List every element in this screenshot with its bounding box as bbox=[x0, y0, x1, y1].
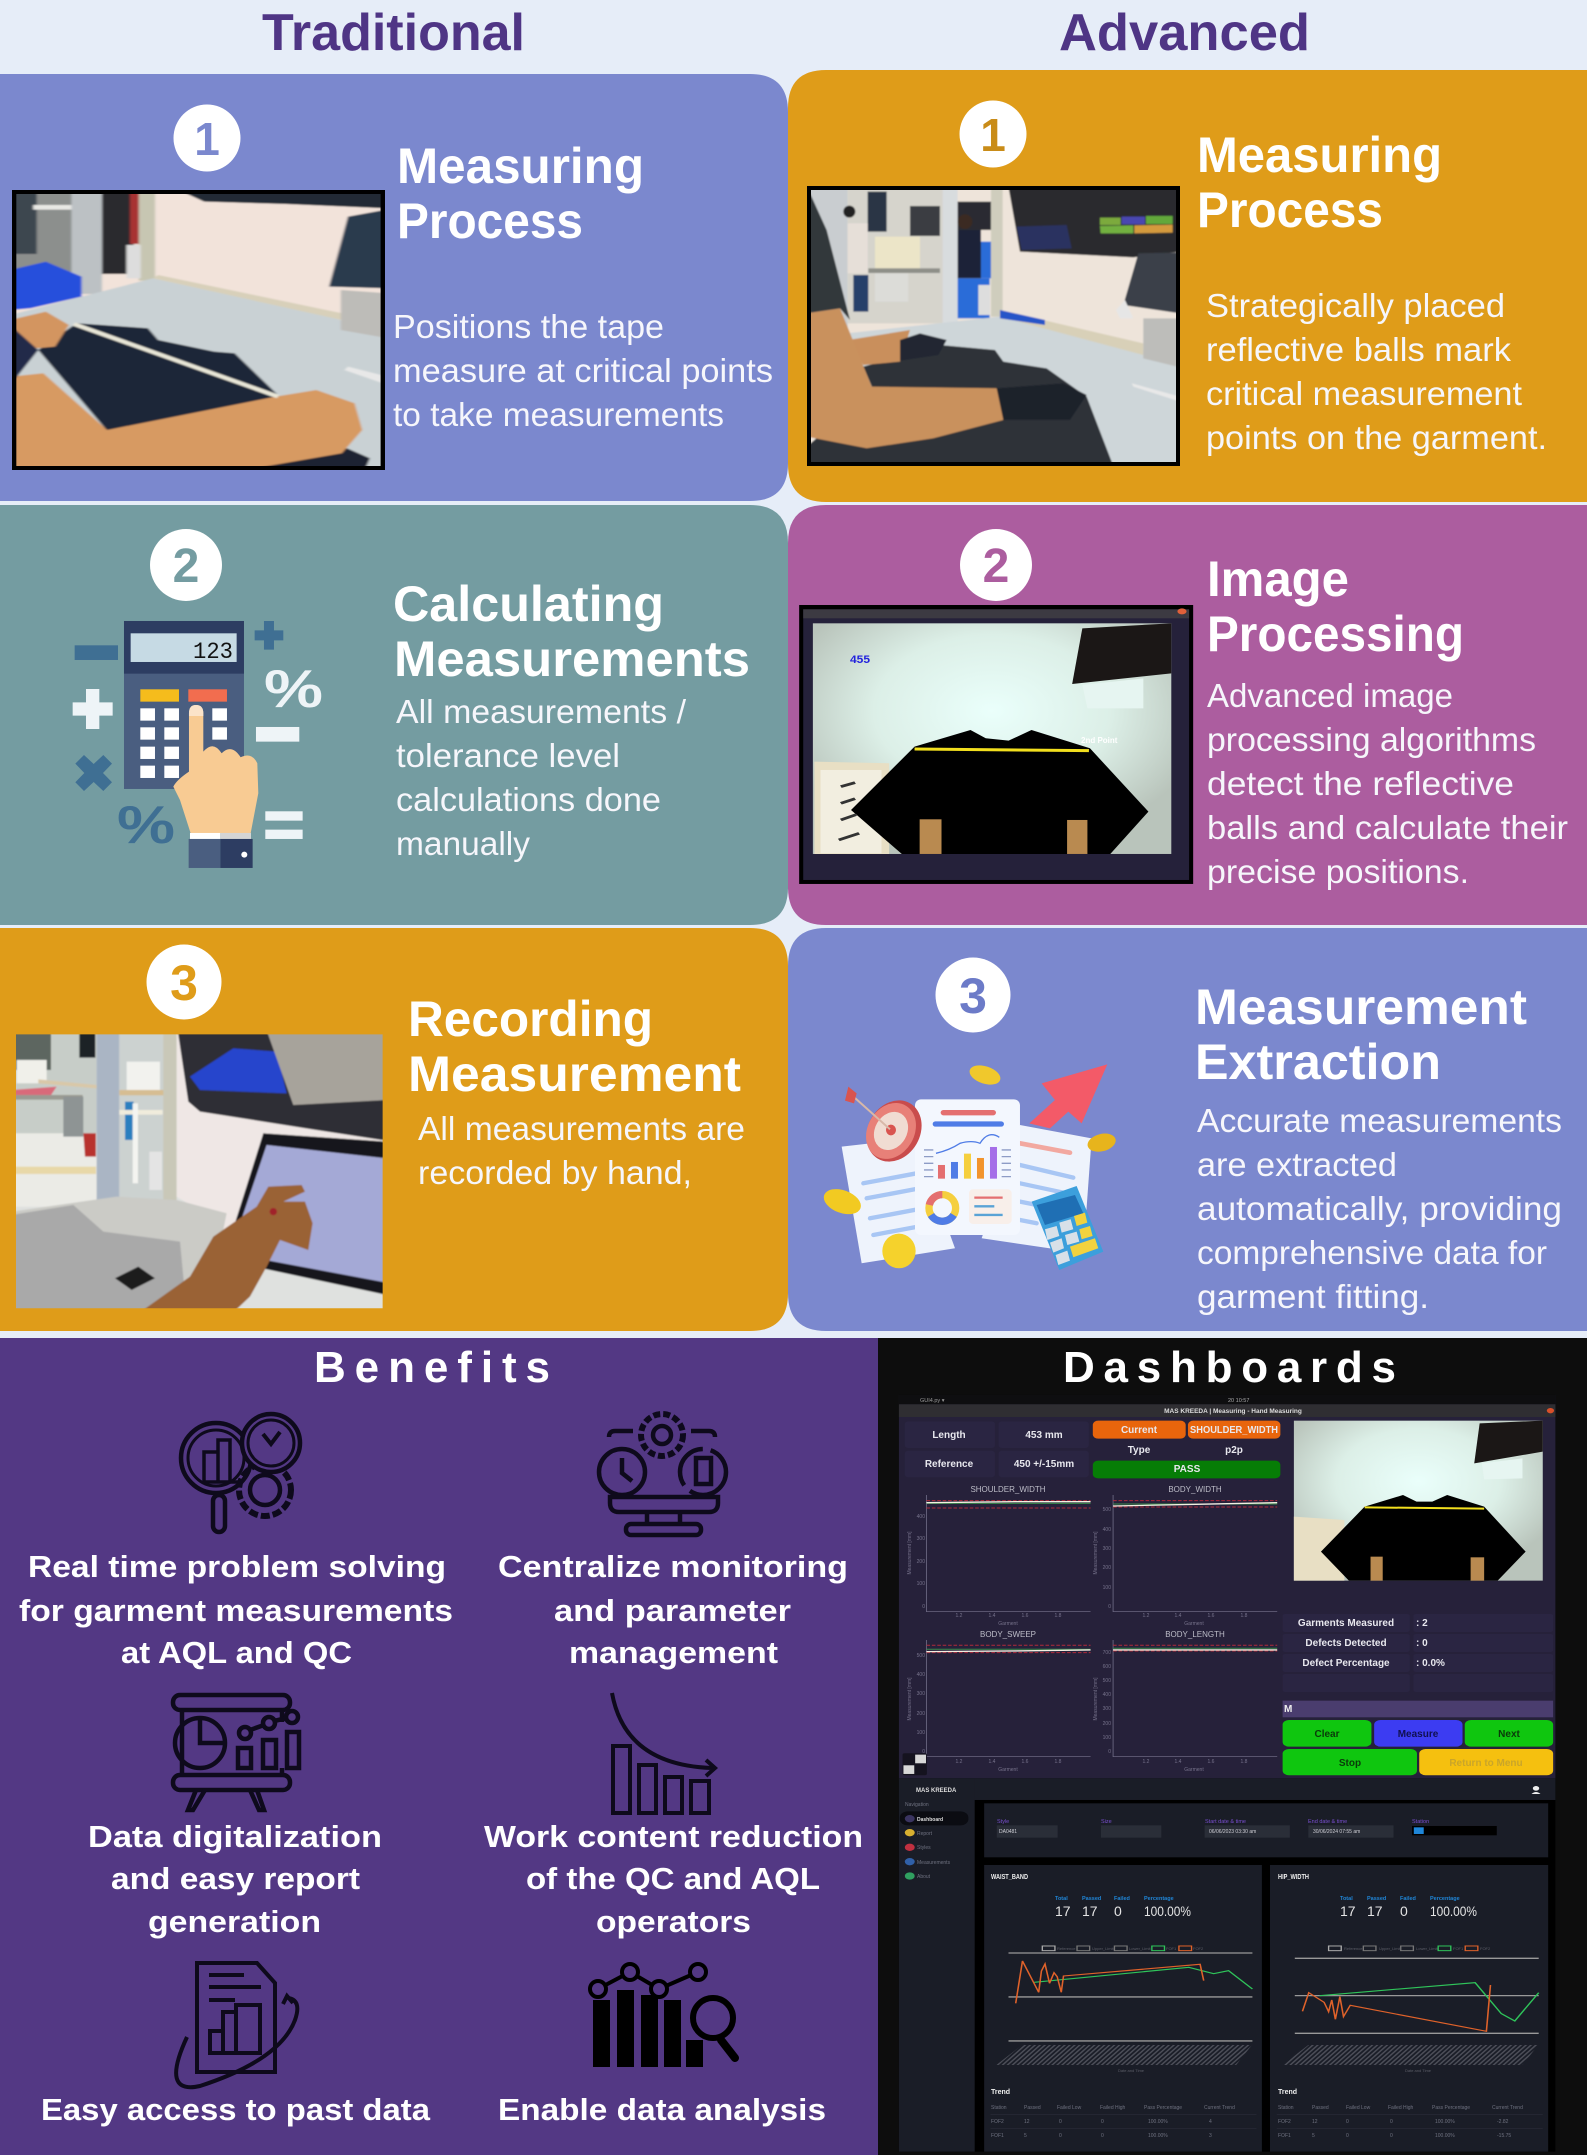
screenshot: trend dashboard: About bbox=[917, 1874, 931, 1880]
screenshot: trend dashboard: FOF1 bbox=[1453, 1946, 1464, 1951]
screenshot: trend dashboard: Styles bbox=[917, 1845, 931, 1851]
screenshot: trend dashboard: Reference bbox=[1057, 1946, 1076, 1951]
screenshot: trend dashboard: 100.00% bbox=[1144, 1903, 1191, 1919]
screenshot: image processing window: 2nd Point bbox=[1081, 736, 1118, 745]
screenshot: trend dashboard: FOF1 bbox=[1166, 1946, 1177, 1951]
screenshot: hand measuring dashboard: Type bbox=[1128, 1445, 1151, 1456]
icon: calculator and hand bbox=[73, 621, 323, 868]
screenshot: hand measuring dashboard: 400 bbox=[917, 1514, 925, 1520]
text: real time problem solving: Real time problem solving bbox=[28, 1549, 446, 1584]
screenshot: hand measuring dashboard: 100 bbox=[917, 1581, 925, 1587]
screenshot: hand measuring dashboard: 1.6 bbox=[1022, 1759, 1029, 1765]
heading: Dashboards: Dashboards bbox=[1063, 1343, 1396, 1392]
step number 3: 3 bbox=[170, 955, 198, 1011]
screenshot: trend dashboard: Date and Time bbox=[1405, 2068, 1432, 2073]
screenshot: hand measuring dashboard: Garments Measured bbox=[1298, 1618, 1394, 1629]
body text: calculations done bbox=[396, 781, 661, 818]
screenshot: hand measuring dashboard: GUI4.py ▾ bbox=[920, 1398, 945, 1404]
screenshot: hand measuring dashboard: 300 bbox=[1103, 1546, 1111, 1552]
step number 2 bbox=[960, 529, 1032, 601]
body text: Advanced image bbox=[1207, 677, 1453, 714]
screenshot: trend dashboard: Station bbox=[991, 2105, 1007, 2111]
screenshot: trend dashboard: 06/06/2023 03:30 am bbox=[1209, 1829, 1256, 1835]
screenshot: trend dashboard: Upper_Limit bbox=[1092, 1946, 1114, 1951]
screenshot: hand measuring dashboard: 100 bbox=[1103, 1585, 1111, 1591]
screenshot: trend dashboard: Trend bbox=[991, 2089, 1010, 2096]
text: centralize monitoring bbox=[498, 1549, 848, 1670]
screenshot: hand measuring dashboard: 1.4 bbox=[1175, 1759, 1182, 1765]
screenshot: hand measuring dashboard: M bbox=[1284, 1704, 1292, 1715]
screenshot: hand measuring dashboard: 400 bbox=[1103, 1527, 1111, 1533]
heading: Benefits: Benefits bbox=[314, 1343, 550, 1392]
screenshot: hand measuring dashboard: Next bbox=[1498, 1729, 1521, 1740]
screenshot: hand measuring dashboard: Measurement [mm] bbox=[907, 1677, 913, 1721]
screenshot: trend dashboard: 0 bbox=[1059, 2119, 1062, 2125]
screenshot: hand measuring dashboard: Return to Menu bbox=[1449, 1758, 1523, 1769]
screenshot: hand measuring dashboard: Defect Percentage bbox=[1302, 1658, 1390, 1669]
body text: points on the garment. bbox=[1206, 419, 1547, 456]
screenshot: image processing window bbox=[799, 605, 1193, 884]
screenshot: trend dashboard: Failed bbox=[1114, 1896, 1130, 1902]
screenshot: hand measuring dashboard: 1.2 bbox=[956, 1613, 963, 1619]
title: Measuring Process bbox=[397, 138, 644, 249]
screenshot: hand measuring dashboard: 300 bbox=[1103, 1706, 1111, 1712]
panel: dashboards bbox=[878, 1338, 1587, 2155]
step number 2 bbox=[150, 529, 222, 601]
title: Measuring Process: Process bbox=[397, 193, 583, 249]
screenshot: hand measuring dashboard: PASS bbox=[1174, 1464, 1201, 1475]
screenshot: trend dashboard: Date and Time bbox=[1118, 2068, 1145, 2073]
body text: Positions the tape bbox=[393, 308, 664, 345]
text: work content reduction: operators bbox=[596, 1904, 751, 1939]
body text: All measurements are bbox=[418, 1110, 745, 1147]
text: centralize monitoring: management bbox=[569, 1635, 778, 1670]
screenshot: hand measuring dashboard: 1.2 bbox=[1143, 1759, 1150, 1765]
screenshot: trend dashboard: DA0481 bbox=[999, 1829, 1017, 1835]
screenshot: hand measuring dashboard: SHOULDER_WIDTH bbox=[970, 1485, 1046, 1494]
text: work content reduction: of the QC and AQL bbox=[526, 1861, 820, 1896]
body text: comprehensive data for bbox=[1197, 1234, 1547, 1271]
screenshot: hand measuring dashboard: BODY_LENGTH bbox=[1165, 1630, 1225, 1639]
screenshot: trend dashboard: Passed bbox=[1312, 2105, 1329, 2111]
step number 2: 2 bbox=[983, 540, 1009, 593]
screenshot: trend dashboard: 0 bbox=[1101, 2119, 1104, 2125]
screenshot: hand measuring dashboard: MAS KREEDA | Measuring - Hand Measuring bbox=[1164, 1408, 1302, 1415]
screenshot: hand measuring dashboard: 1.8 bbox=[1055, 1759, 1062, 1765]
screenshot: hand measuring dashboard: 1.2 bbox=[1143, 1613, 1150, 1619]
icon: declining bars with arrow bbox=[612, 1693, 715, 1813]
screenshot: trend dashboard: Current Trend bbox=[1492, 2105, 1523, 2111]
screenshot: trend dashboard: Trend bbox=[1278, 2089, 1297, 2096]
step number 3: 3 bbox=[959, 968, 987, 1024]
screenshot: trend dashboard: 17 bbox=[1055, 1903, 1071, 1919]
screenshot: hand measuring dashboard: Stop bbox=[1339, 1758, 1361, 1769]
screenshot: trend dashboard: Failed Low bbox=[1346, 2105, 1371, 2111]
text: real time problem solving: at AQL and QC bbox=[121, 1635, 352, 1670]
screenshot: trend dashboard: Station bbox=[1412, 1819, 1429, 1825]
title: Calculating Measurements: Calculating bbox=[393, 576, 664, 632]
screenshot: hand measuring dashboard: Garment bbox=[998, 1621, 1018, 1627]
body text: detect the reflective bbox=[1207, 765, 1514, 802]
icon: calculator and hand: % bbox=[264, 660, 323, 719]
screenshot: trend dashboard: 100.00% bbox=[1148, 2133, 1168, 2139]
screenshot: trend dashboard: HIP_WIDTH bbox=[1278, 1874, 1309, 1881]
body text: processing algorithms bbox=[1207, 721, 1536, 758]
screenshot: hand measuring dashboard: 450 +/-15mm bbox=[1014, 1459, 1074, 1470]
screenshot: trend dashboard: 100.00% bbox=[1435, 2133, 1455, 2139]
title: Recording Measurement: Recording bbox=[408, 991, 653, 1047]
text: data digitalization: and easy report bbox=[111, 1861, 360, 1896]
body text: reflective balls mark bbox=[1206, 331, 1512, 368]
screenshot: hand measuring dashboard: 200 bbox=[917, 1711, 925, 1717]
screenshot: trend dashboard: End date & time bbox=[1308, 1819, 1347, 1825]
screenshot: hand measuring dashboard: Measurement [mm] bbox=[1093, 1677, 1099, 1721]
screenshot: hand measuring dashboard: Reference bbox=[925, 1459, 974, 1470]
screenshot: trend dashboard: Navigation bbox=[905, 1802, 929, 1808]
screenshot: trend dashboard: Failed High bbox=[1388, 2105, 1414, 2111]
screenshot: hand measuring dashboard: 20 10:57 bbox=[1228, 1398, 1249, 1404]
screenshot: trend dashboard: 0 bbox=[1346, 2119, 1349, 2125]
screenshot: hand measuring dashboard: 400 bbox=[917, 1672, 925, 1678]
screenshot: hand measuring dashboard: Garment bbox=[1184, 1621, 1204, 1627]
screenshot: hand measuring dashboard: SHOULDER_WIDTH bbox=[1190, 1425, 1278, 1436]
screenshot: hand measuring dashboard: Measurement [mm] bbox=[1093, 1531, 1099, 1575]
screenshot: hand measuring dashboard: Measurement [mm] bbox=[907, 1531, 913, 1575]
screenshot: trend dashboard: Failed Low bbox=[1057, 2105, 1082, 2111]
screenshot: trend dashboard: Reference bbox=[1344, 1946, 1363, 1951]
title: Image Processing bbox=[1207, 551, 1464, 662]
screenshot: hand measuring dashboard: 0 bbox=[1108, 1604, 1111, 1610]
screenshot: hand measuring dashboard: 1.8 bbox=[1241, 1613, 1248, 1619]
screenshot: trend dashboard: FOF2 bbox=[1480, 1946, 1491, 1951]
step number 2: 2 bbox=[173, 540, 199, 593]
screenshot: trend dashboard: -2.82 bbox=[1497, 2119, 1509, 2125]
screenshot: trend dashboard: Percentage bbox=[1430, 1896, 1460, 1902]
screenshot: trend dashboard: WAIST_BAND bbox=[991, 1874, 1028, 1881]
screenshot: hand measuring dashboard: 300 bbox=[917, 1536, 925, 1542]
screenshot: hand measuring dashboard: 500 bbox=[1103, 1507, 1111, 1513]
screenshot: hand measuring dashboard: Measure bbox=[1398, 1729, 1439, 1740]
title: Measurement Extraction: Extraction bbox=[1195, 1034, 1441, 1090]
screenshot: hand measuring dashboard: 1.6 bbox=[1022, 1613, 1029, 1619]
body text: manually bbox=[396, 825, 530, 862]
step number 1: 1 bbox=[194, 113, 220, 165]
body text: tolerance level bbox=[396, 737, 620, 774]
screenshot: trend dashboard: Measurements bbox=[917, 1860, 951, 1866]
screenshot: hand measuring dashboard: 453 mm bbox=[1025, 1430, 1063, 1441]
body text: Accurate measurements bbox=[1197, 1102, 1562, 1139]
screenshot: hand measuring dashboard: 1.6 bbox=[1208, 1613, 1215, 1619]
title: Recording Measurement bbox=[408, 991, 741, 1102]
screenshot: trend dashboard: Lower_Limit bbox=[1129, 1946, 1151, 1951]
screenshot: hand measuring dashboard: 0 bbox=[922, 1749, 925, 1755]
text: centralize monitoring: Centralize monitoring bbox=[498, 1549, 848, 1584]
screenshot: trend dashboard: 0 bbox=[1390, 2133, 1393, 2139]
screenshot: trend dashboard: 5 bbox=[1024, 2133, 1027, 2139]
screenshot: trend dashboard: Failed High bbox=[1100, 2105, 1126, 2111]
screenshot: trend dashboard: Lower_Limit bbox=[1416, 1946, 1438, 1951]
screenshot: hand measuring dashboard bbox=[899, 1395, 1555, 1780]
screenshot: hand measuring dashboard: 1.6 bbox=[1208, 1759, 1215, 1765]
body text: are extracted bbox=[1197, 1146, 1397, 1183]
icon: document with chart and arrow bbox=[176, 1963, 297, 2087]
title: Measuring Process bbox=[1197, 127, 1442, 238]
panel: measurement extraction bbox=[788, 928, 1587, 1331]
screenshot: trend dashboard: 0 bbox=[1400, 1903, 1408, 1919]
screenshot: trend dashboard: 0 bbox=[1346, 2133, 1349, 2139]
screenshot: trend dashboard: Passed bbox=[1367, 1896, 1386, 1902]
text: real time problem solving: for garment measurements bbox=[19, 1593, 453, 1628]
photo: recording by hand on tablet bbox=[12, 1030, 387, 1312]
body text: to take measurements bbox=[393, 396, 724, 433]
screenshot: trend dashboard: Pass Percentage bbox=[1144, 2105, 1182, 2111]
photo: tape measure on garment bbox=[10, 190, 388, 470]
screenshot: hand measuring dashboard: 700 bbox=[1103, 1650, 1111, 1656]
screenshot: trend dashboard: FOF1 bbox=[1278, 2133, 1291, 2139]
screenshot: trend dashboard: 100.00% bbox=[1430, 1903, 1477, 1919]
screenshot: hand measuring dashboard: 1.2 bbox=[956, 1759, 963, 1765]
icon: calculator and hand: 123 bbox=[193, 639, 233, 665]
screenshot: trend dashboard: Total bbox=[1340, 1896, 1353, 1902]
screenshot: trend dashboard: Size bbox=[1101, 1819, 1112, 1825]
body text: critical measurement bbox=[1206, 375, 1522, 412]
screenshot: trend dashboard: 12 bbox=[1312, 2119, 1318, 2125]
screenshot: trend dashboard: FOF2 bbox=[1193, 1946, 1204, 1951]
screenshot: trend dashboard: 17 bbox=[1082, 1903, 1098, 1919]
screenshot: trend dashboard: 4 bbox=[1209, 2119, 1212, 2125]
icon: bar chart with line and magnifier bbox=[590, 1964, 735, 2067]
photo: reflective balls on garment bbox=[807, 186, 1180, 466]
title: Recording Measurement: Measurement bbox=[408, 1046, 741, 1102]
screenshot: trend dashboard: Start date & time bbox=[1205, 1819, 1246, 1825]
screenshot: hand measuring dashboard: 500 bbox=[917, 1653, 925, 1659]
screenshot: trend dashboard: FOF2 bbox=[991, 2119, 1004, 2125]
screenshot: hand measuring dashboard: BODY_WIDTH bbox=[1168, 1485, 1222, 1494]
screenshot: hand measuring dashboard: 1.4 bbox=[1175, 1613, 1182, 1619]
screenshot: trend dashboard: 3 bbox=[1209, 2133, 1212, 2139]
screenshot: hand measuring dashboard: 1.8 bbox=[1241, 1759, 1248, 1765]
screenshot: trend dashboard: 0 bbox=[1390, 2119, 1393, 2125]
screenshot: hand measuring dashboard: 1.8 bbox=[1055, 1613, 1062, 1619]
icon: monitor with gear, clock and document bbox=[599, 1414, 726, 1535]
screenshot: hand measuring dashboard: p2p bbox=[1225, 1445, 1243, 1456]
body text bbox=[393, 308, 773, 433]
screenshot: hand measuring dashboard: 400 bbox=[1103, 1692, 1111, 1698]
screenshot: hand measuring dashboard: 300 bbox=[917, 1691, 925, 1697]
screenshot: trend dashboard: 100.00% bbox=[1148, 2119, 1168, 2125]
screenshot: trend dashboard: 30/06/2024 07:55 am bbox=[1313, 1829, 1360, 1835]
text: centralize monitoring: and parameter bbox=[554, 1593, 791, 1628]
screenshot: trend dashboard: FOF1 bbox=[991, 2133, 1004, 2139]
icon: calculator and hand: % bbox=[117, 796, 175, 855]
body text: All measurements / bbox=[396, 693, 687, 730]
screenshot: trend dashboard: Dashboard bbox=[917, 1817, 943, 1823]
panel: image processing bbox=[788, 505, 1587, 925]
screenshot: hand measuring dashboard: Length bbox=[932, 1430, 966, 1441]
screenshot: hand measuring dashboard: 200 bbox=[1103, 1565, 1111, 1571]
screenshot: trend dashboard: Upper_Limit bbox=[1379, 1946, 1401, 1951]
text: data digitalization: Data digitalization bbox=[88, 1819, 382, 1854]
screenshot: trend dashboard: Pass Percentage bbox=[1432, 2105, 1470, 2111]
screenshot: hand measuring dashboard: BODY_SWEEP bbox=[980, 1630, 1036, 1639]
text: real time problem solving bbox=[19, 1549, 453, 1670]
screenshot: trend dashboard: 0 bbox=[1059, 2133, 1062, 2139]
screenshot: trend dashboard: 0 bbox=[1101, 2133, 1104, 2139]
screenshot: hand measuring dashboard: 100 bbox=[917, 1730, 925, 1736]
title: Calculating Measurements bbox=[393, 576, 750, 687]
text: data digitalization: generation bbox=[148, 1904, 321, 1939]
body text: recorded by hand, bbox=[418, 1154, 692, 1191]
step number 1 bbox=[960, 100, 1026, 168]
screenshot: trend dashboard: Current Trend bbox=[1204, 2105, 1235, 2111]
screenshot: hand measuring dashboard: 1.4 bbox=[989, 1613, 996, 1619]
text: enable data analysis: Enable data analysis bbox=[498, 2092, 826, 2127]
body text: Strategically placed bbox=[1206, 287, 1505, 324]
screenshot: trend dashboard: FOF2 bbox=[1278, 2119, 1291, 2125]
body text bbox=[1207, 677, 1568, 890]
text: work content reduction bbox=[484, 1819, 863, 1939]
icon: presentation board with charts bbox=[173, 1695, 299, 1810]
panel: recording measurement bbox=[0, 928, 788, 1331]
step number 3 bbox=[146, 944, 222, 1020]
screenshot: hand measuring dashboard: 200 bbox=[917, 1559, 925, 1565]
icon: magnifier, clock and gear bbox=[181, 1414, 300, 1532]
body text bbox=[418, 1110, 745, 1191]
body text bbox=[396, 693, 687, 862]
screenshot: hand measuring dashboard: Current bbox=[1121, 1425, 1158, 1436]
screenshot: trend dashboard: 12 bbox=[1024, 2119, 1030, 2125]
panel: calculating measurements bbox=[0, 505, 788, 925]
text: work content reduction: Work content reduction bbox=[484, 1819, 863, 1854]
screenshot: hand measuring dashboard: : 2 bbox=[1416, 1618, 1428, 1629]
screenshot: trend dashboard: Failed bbox=[1400, 1896, 1416, 1902]
heading: Advanced: Advanced bbox=[1059, 4, 1310, 62]
screenshot: hand measuring dashboard: 0 bbox=[922, 1604, 925, 1610]
screenshot: hand measuring dashboard: : 0.0% bbox=[1416, 1658, 1445, 1669]
screenshot: trend dashboard: Passed bbox=[1024, 2105, 1041, 2111]
title: Image Processing: Image bbox=[1207, 551, 1349, 607]
step number 3 bbox=[936, 958, 1010, 1032]
illustration: report with charts, target, coins, calculator bbox=[820, 1062, 1118, 1270]
screenshot: hand measuring dashboard: 200 bbox=[1103, 1721, 1111, 1727]
title: Image Processing: Processing bbox=[1207, 606, 1464, 662]
screenshot: hand measuring dashboard: 100 bbox=[1103, 1735, 1111, 1741]
screenshot: trend dashboard: Station bbox=[1278, 2105, 1294, 2111]
screenshot: trend dashboard: 17 bbox=[1367, 1903, 1383, 1919]
title: Calculating Measurements: Measurements bbox=[394, 631, 750, 687]
screenshot: trend dashboard: Total bbox=[1055, 1896, 1068, 1902]
screenshot: image processing window: 455 bbox=[850, 654, 870, 666]
screenshot: trend dashboard: Style bbox=[997, 1819, 1009, 1825]
screenshot: hand measuring dashboard: 1.4 bbox=[989, 1759, 996, 1765]
screenshot: hand measuring dashboard: : 0 bbox=[1416, 1638, 1428, 1649]
title: Measurement Extraction: Measurement bbox=[1195, 979, 1527, 1035]
step number 1 bbox=[174, 104, 240, 172]
title: Measuring Process: Measuring bbox=[397, 138, 644, 194]
screenshot: trend dashboard: 5 bbox=[1312, 2133, 1315, 2139]
panel: traditional measuring process bbox=[0, 74, 788, 501]
panel: advanced measuring process bbox=[788, 70, 1587, 502]
screenshot: hand measuring dashboard: 500 bbox=[1103, 1678, 1111, 1684]
screenshot: trend dashboard bbox=[899, 1778, 1555, 2152]
screenshot: hand measuring dashboard: Clear bbox=[1314, 1729, 1340, 1740]
body text: garment fitting. bbox=[1197, 1278, 1429, 1315]
screenshot: hand measuring dashboard: 0 bbox=[1108, 1749, 1111, 1755]
heading: Traditional: Traditional bbox=[262, 4, 525, 62]
body text: measure at critical points bbox=[393, 352, 773, 389]
screenshot: trend dashboard: 17 bbox=[1340, 1903, 1356, 1919]
body text: precise positions. bbox=[1207, 853, 1469, 890]
screenshot: trend dashboard: MAS KREEDA bbox=[916, 1788, 957, 1794]
screenshot: trend dashboard: 100.00% bbox=[1435, 2119, 1455, 2125]
screenshot: hand measuring dashboard: Defects Detected bbox=[1305, 1638, 1387, 1649]
screenshot: hand measuring dashboard: Garment bbox=[998, 1767, 1018, 1773]
screenshot: trend dashboard: 0 bbox=[1114, 1903, 1122, 1919]
screenshot: trend dashboard: Passed bbox=[1082, 1896, 1101, 1902]
body text bbox=[1197, 1102, 1562, 1315]
screenshot: hand measuring dashboard: 600 bbox=[1103, 1664, 1111, 1670]
screenshot: hand measuring dashboard: Garment bbox=[1184, 1767, 1204, 1773]
text: easy access to past data: Easy access to past data bbox=[41, 2092, 431, 2127]
screenshot: trend dashboard: -15.75 bbox=[1497, 2133, 1511, 2139]
screenshot: trend dashboard: Report bbox=[917, 1831, 933, 1837]
body text bbox=[1206, 287, 1547, 456]
text: data digitalization bbox=[88, 1819, 382, 1939]
title: Measuring Process: Measuring bbox=[1197, 127, 1442, 183]
title: Measuring Process: Process bbox=[1197, 182, 1383, 238]
title: Measurement Extraction bbox=[1195, 979, 1527, 1090]
body text: balls and calculate their bbox=[1207, 809, 1568, 846]
step number 1: 1 bbox=[980, 109, 1006, 161]
screenshot: trend dashboard: Percentage bbox=[1144, 1896, 1174, 1902]
panel: benefits bbox=[0, 1338, 878, 2155]
body text: automatically, providing bbox=[1197, 1190, 1562, 1227]
